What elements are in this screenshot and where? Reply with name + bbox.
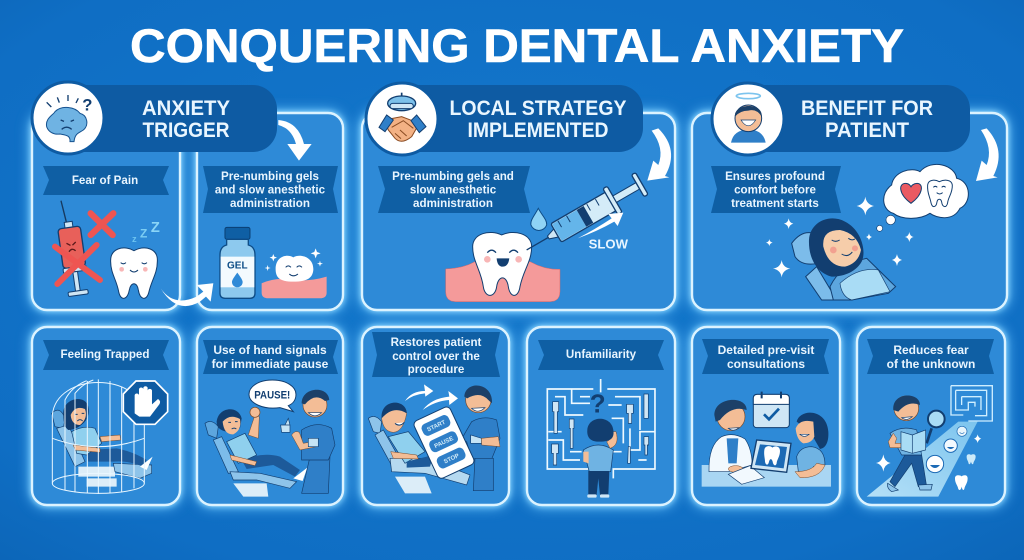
icon: happy tooth in gum: [262, 248, 327, 298]
banner: pre-visit consultations: [702, 339, 829, 374]
panel: benefit: [692, 113, 1007, 310]
panel: local strategy: [362, 113, 675, 310]
banner: reduces fear: [867, 339, 994, 374]
banner: pre-visit consultations: Detailed pre-visit: [718, 343, 814, 357]
banner: unfamiliarity: [538, 340, 664, 370]
banner: comfort: [711, 166, 841, 213]
icon: dentist with thumbs up: [281, 390, 335, 493]
banner: feeling trapped: Feeling Trapped: [61, 348, 149, 361]
arrow: benefit: [976, 128, 999, 181]
icon: confused man: [583, 388, 617, 498]
banner: hand signals: Use of hand signals: [213, 343, 327, 357]
banner: pre-numbing gels: [203, 166, 338, 213]
arrow: anxiety trigger: [278, 120, 312, 161]
banner: pre-numbing gels: and slow anesthetic: [215, 184, 326, 196]
arrow: between top panels: [161, 283, 213, 306]
heading: anxiety trigger: TRIGGER: [142, 119, 230, 142]
icon: dental tools in maze: [552, 394, 649, 465]
icon: small maze: [951, 386, 992, 421]
icon: tooth in gum: [446, 232, 560, 302]
icon: syringe: [519, 170, 649, 263]
panel: feeling trapped: [32, 327, 180, 505]
icon: relaxed patient: [792, 218, 896, 300]
banner: pre-numbing strategy: administration: [413, 197, 493, 210]
callout: pause speech bubble: [249, 380, 296, 412]
banner: hand signals: for immediate pause: [212, 357, 329, 371]
heading: anxiety trigger: ANXIETY: [142, 97, 230, 120]
title: CONQUERING DENTAL ANXIETY: [130, 19, 904, 72]
icon: sleeping tooth: Z: [151, 220, 160, 236]
icon: thought cloud: [877, 164, 968, 231]
icon: sleeping tooth: [111, 220, 160, 298]
panel: fear of pain: [32, 113, 180, 310]
icon: light path: [867, 422, 978, 497]
icon: handshake and lamp: [379, 93, 426, 141]
panel: hand signals: [197, 327, 343, 505]
banner: restores control: control over the: [392, 350, 480, 363]
banner: fear of pain: Fear of Pain: [72, 174, 138, 187]
banner: pre-visit consultations: consultations: [727, 357, 805, 371]
icon: confused man: ?: [590, 388, 606, 418]
banner: pre-numbing gels: administration: [230, 197, 310, 210]
arrow: local strategy: [647, 128, 671, 181]
icon: patient in chair: [52, 399, 153, 487]
heading: local strategy: IMPLEMENTED: [468, 119, 608, 142]
banner: restores control: procedure: [408, 363, 465, 376]
icon: patient with control panel and dentist: PAUSE: [434, 436, 455, 450]
icon: tablet with tooth: [751, 440, 791, 472]
icon: dentist: [709, 400, 764, 484]
panel: pre-numbing gels trigger: [197, 113, 343, 310]
heading: anxiety trigger: [32, 82, 277, 154]
banner: reduces fear: of the unknown: [887, 357, 975, 371]
icon: patient raising hand: [205, 407, 307, 497]
icon: patient with control panel and dentist: STOP: [443, 453, 460, 465]
icon: sparkles: [766, 197, 914, 277]
icon: stop sign: [123, 381, 168, 424]
banner: restores control: [372, 332, 500, 377]
icon: crossed-out syringe: [55, 201, 113, 297]
panel: unfamiliarity: [527, 327, 675, 505]
icon: cage: [52, 379, 144, 494]
banner: fear of pain: [43, 166, 169, 195]
banner: hand signals: [203, 340, 338, 374]
icon: calendar: [753, 392, 789, 428]
banner: comfort: treatment starts: [731, 197, 819, 210]
heading: benefit: PATIENT: [825, 119, 909, 142]
icon: faces and teeth on path: [876, 426, 981, 490]
icon: patient with control panel and dentist: START: [426, 420, 447, 433]
heading: benefit: [712, 83, 970, 155]
banner: feeling trapped: [43, 340, 169, 370]
heading: local strategy: LOCAL STRATEGY: [450, 97, 626, 120]
banner: pre-numbing strategy: [378, 166, 530, 213]
icon: gel bottle: [220, 227, 255, 298]
icon: sleeping tooth: Z: [140, 226, 147, 240]
banner: restores control: Restores patient: [391, 336, 482, 349]
panel: pre-visit consultations: [692, 327, 840, 505]
banner: unfamiliarity: Unfamiliarity: [566, 348, 637, 361]
heading: local strategy: [366, 83, 643, 155]
icon: patient woman: [795, 413, 828, 478]
icon: worried brain: [46, 95, 92, 142]
icon: gel bottle: GEL: [227, 260, 248, 271]
icon: maze: [547, 379, 655, 478]
icon: patient with control panel and dentist: [368, 384, 500, 493]
icon: desk: [702, 465, 831, 487]
heading: benefit: BENEFIT FOR: [801, 97, 933, 120]
banner: pre-numbing gels: Pre-numbing gels: [221, 170, 319, 183]
banner: pre-numbing strategy: Pre-numbing gels and: [392, 170, 514, 183]
panel: reduces fear: [857, 327, 1005, 505]
icon: sleeping tooth: z: [132, 234, 137, 244]
icon: worried brain: ?: [82, 96, 92, 115]
callout: pause speech bubble: PAUSE!: [254, 389, 290, 401]
banner: pre-numbing strategy: slow anesthetic: [410, 184, 497, 196]
banner: reduces fear: Reduces fear: [893, 343, 969, 357]
icon: happy man with halo: [731, 93, 766, 143]
icon: walking man with map and magnifier: [887, 396, 945, 492]
banner: comfort: comfort before: [734, 184, 816, 196]
banner: comfort: Ensures profound: [725, 170, 825, 183]
icon: syringe: SLOW: [589, 238, 628, 252]
panel: restores control: [362, 327, 509, 505]
